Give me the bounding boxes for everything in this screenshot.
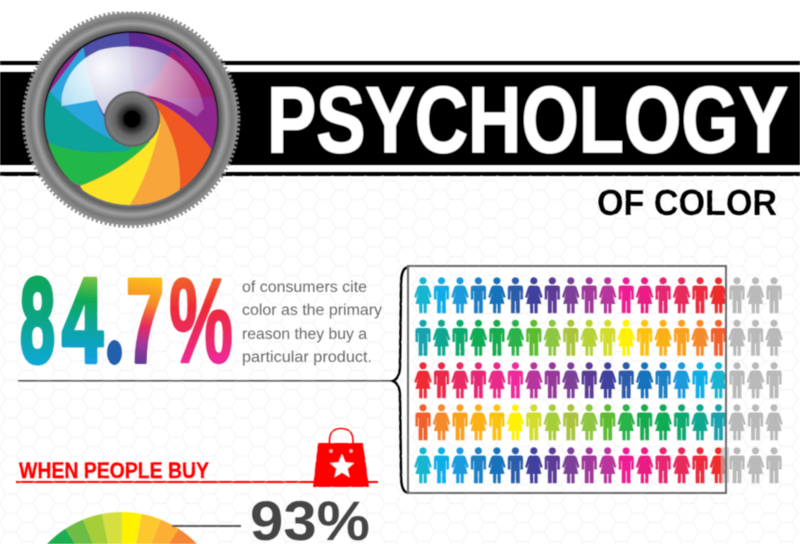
stat description xyxy=(242,279,382,366)
big stat 84.7%: 7 xyxy=(126,254,164,388)
stat divider line xyxy=(18,380,393,382)
lens pupil xyxy=(124,110,140,128)
row 3 of people xyxy=(414,362,782,398)
section heading rule xyxy=(16,481,378,483)
lens highlight xyxy=(62,47,204,119)
big stat 84.7%: 8 xyxy=(20,254,55,388)
row 1 of people xyxy=(414,277,782,313)
section heading: WHEN PEOPLE BUY xyxy=(19,458,209,483)
people chart xyxy=(414,277,783,483)
lens iris xyxy=(104,91,160,147)
lens metal ring xyxy=(24,12,238,226)
big stat 84.7%: 4 xyxy=(62,254,103,388)
stat description: reason they buy a xyxy=(242,326,367,343)
subtitle: OF COLOR xyxy=(597,182,777,223)
brace xyxy=(393,267,408,493)
icon: camera lens xyxy=(24,12,238,226)
row 5 of people xyxy=(414,447,782,483)
big stat 84.7% xyxy=(20,254,233,388)
stat description: color as the primary xyxy=(242,302,382,319)
big stat 84.7%: . xyxy=(106,254,121,388)
icon: shopping bag xyxy=(313,428,369,487)
row 4 of people xyxy=(415,404,783,440)
lens colour blades xyxy=(37,30,220,213)
chart frame xyxy=(408,266,726,493)
stat description: particular product. xyxy=(242,349,372,366)
row 2 of people xyxy=(415,320,783,356)
stat description: of consumers cite xyxy=(242,279,367,296)
gauge semicircle xyxy=(47,512,197,544)
gauge leader line xyxy=(172,525,241,527)
big stat 84.7%: % xyxy=(169,254,233,388)
lens knurled edge xyxy=(24,12,238,226)
header banner xyxy=(0,61,800,176)
decimal point dot xyxy=(107,340,122,365)
partial figure overlay xyxy=(721,448,729,483)
